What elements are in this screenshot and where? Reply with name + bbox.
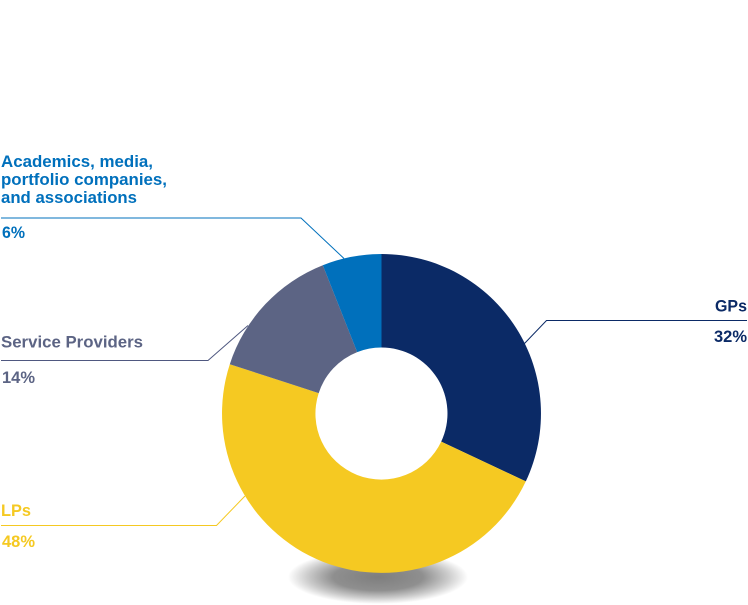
label: Academics, media, portfolio companies, and associations: portfolio companies, xyxy=(1,171,167,189)
label: Academics, media, portfolio companies, and associations: and associations xyxy=(1,189,137,207)
label: Academics, media, portfolio companies, and associations xyxy=(1,153,344,258)
value: 32% xyxy=(714,328,747,346)
value: 6% xyxy=(2,224,25,242)
donut shadow xyxy=(288,550,468,604)
label text: Service Providers xyxy=(1,334,143,352)
label: LPs xyxy=(1,496,245,551)
value: 48% xyxy=(2,533,35,551)
leader line xyxy=(1,326,248,360)
label: GPs xyxy=(524,298,747,346)
donut chart xyxy=(222,254,541,573)
value: 14% xyxy=(2,369,35,387)
label text: LPs xyxy=(1,502,31,520)
label: Service Providers xyxy=(1,326,248,387)
segment: Service Providers 14% xyxy=(230,265,357,393)
segment: GPs 32% xyxy=(382,254,541,481)
leader line xyxy=(524,320,747,344)
leader line xyxy=(1,496,245,526)
segment: Academics 6% xyxy=(323,254,382,352)
label text: Academics, media, xyxy=(1,153,153,171)
segment: LPs 48% xyxy=(222,364,526,573)
leader line xyxy=(1,218,344,258)
label text: GPs xyxy=(715,298,747,316)
